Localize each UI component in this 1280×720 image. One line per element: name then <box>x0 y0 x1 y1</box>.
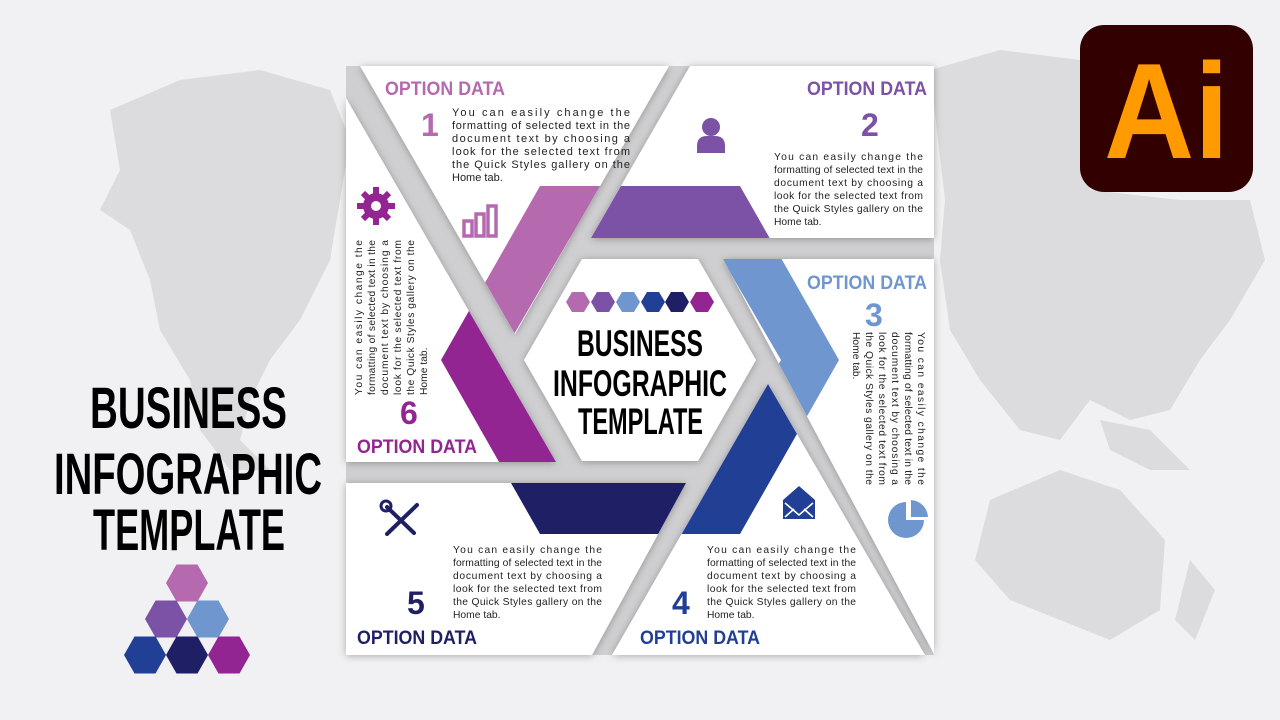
panel 5 content: the Quick Styles gallery on the <box>453 597 602 608</box>
panel 4 content: You can easily change the <box>707 545 856 556</box>
panel 5 content: look for the selected text from <box>453 584 602 595</box>
panel 5 content: Home tab. <box>453 610 501 621</box>
center title <box>553 323 727 442</box>
panel 1 content: formatting of selected text in the <box>452 120 630 132</box>
panel 1 content: look for the selected text from <box>452 146 630 158</box>
panel 6 content: Home tab. <box>419 347 430 395</box>
frame gap background <box>346 66 934 655</box>
panel 2 content: OPTION DATA <box>807 79 927 100</box>
background world map <box>100 50 1265 640</box>
panel 1 content: Home tab. <box>452 172 503 184</box>
panel 6 content: document text by choosing a <box>380 240 391 395</box>
icon: bar chart <box>464 206 496 236</box>
panel 5 content: OPTION DATA <box>357 628 477 649</box>
panel 6 content: 6 <box>400 395 418 431</box>
panel 4 content: 4 <box>672 585 690 621</box>
panel 3 <box>723 259 934 654</box>
panel 2 content: You can easily change the <box>774 152 923 163</box>
panel 2 content: formatting of selected text in the <box>774 165 923 176</box>
panel 5 content: document text by choosing a <box>453 571 602 582</box>
panel 1 content: 1 <box>421 107 439 143</box>
panel 1 content <box>385 79 631 236</box>
panel 6 content: OPTION DATA <box>357 437 477 458</box>
panel 1 content: document text by choosing a <box>452 133 631 145</box>
panel 4 content: the Quick Styles gallery on the <box>707 597 856 608</box>
icon: envelope <box>783 486 815 519</box>
panel 1 content: You can easily change the <box>452 107 630 119</box>
center title: TEMPLATE <box>578 401 703 442</box>
panel 3 content <box>807 273 928 538</box>
panel 5 content <box>357 501 602 649</box>
left title: TEMPLATE <box>93 498 285 563</box>
panel 3 content: look for the selected text from <box>876 332 887 485</box>
panel 2 content <box>697 79 927 228</box>
panel 3 content: OPTION DATA <box>807 273 927 294</box>
panel 4 content: OPTION DATA <box>640 628 760 649</box>
panel 5 content: 5 <box>407 585 425 621</box>
panel 3 content: formatting of selected text in the <box>902 332 913 485</box>
panel 6 content: formatting of selected text in the <box>367 240 378 395</box>
panel 2 content: document text by choosing a <box>774 178 923 189</box>
panel 3 content: Home tab. <box>850 332 861 380</box>
panel 2 content: the Quick Styles gallery on the <box>774 204 923 215</box>
icon: pie chart <box>888 500 928 538</box>
panel 3 content: the Quick Styles gallery on the <box>863 332 874 485</box>
panel 6 content: the Quick Styles gallery on the <box>406 240 417 395</box>
left title <box>54 376 322 563</box>
Ai logo: Ai <box>1104 35 1229 187</box>
icon: person <box>697 118 725 153</box>
center title: BUSINESS <box>577 323 703 364</box>
center color hexes <box>566 292 714 312</box>
panel 6 content: look for the selected text from <box>393 240 404 395</box>
panel 2 content: Home tab. <box>774 217 822 228</box>
panel 2 content: look for the selected text from <box>774 191 923 202</box>
panel 4 content: look for the selected text from <box>707 584 856 595</box>
panel 6 content: You can easily change the <box>354 240 365 395</box>
left title: BUSINESS <box>90 376 287 441</box>
panel 6 content <box>354 187 477 458</box>
panel 4 content: formatting of selected text in the <box>707 558 856 569</box>
panel 4 content <box>640 486 856 649</box>
panel 3 content: document text by choosing a <box>889 332 900 485</box>
panel 4 content: Home tab. <box>707 610 755 621</box>
panel 3 content: You can easily change the <box>915 332 926 485</box>
panel 5 <box>346 483 686 655</box>
panel 4 content: document text by choosing a <box>707 571 856 582</box>
panel 2 <box>591 66 934 238</box>
icon: tools <box>381 501 417 534</box>
hexagon ring segments <box>441 186 839 534</box>
panel 5 content: formatting of selected text in the <box>453 558 602 569</box>
panel 6 <box>346 98 556 462</box>
center hexagon <box>524 259 756 461</box>
panel 1 content: OPTION DATA <box>385 79 505 100</box>
left title: INFOGRAPHIC <box>54 442 322 507</box>
panel 1 content: the Quick Styles gallery on the <box>452 159 630 171</box>
hexagon pyramid <box>124 564 250 674</box>
panel 2 content: 2 <box>861 107 879 143</box>
panel 5 content: You can easily change the <box>453 545 602 556</box>
panel 4 <box>612 384 925 655</box>
panel 1 <box>360 66 669 334</box>
panel 3 content: 3 <box>865 297 883 333</box>
center title: INFOGRAPHIC <box>553 363 727 404</box>
icon: gear <box>357 187 395 225</box>
